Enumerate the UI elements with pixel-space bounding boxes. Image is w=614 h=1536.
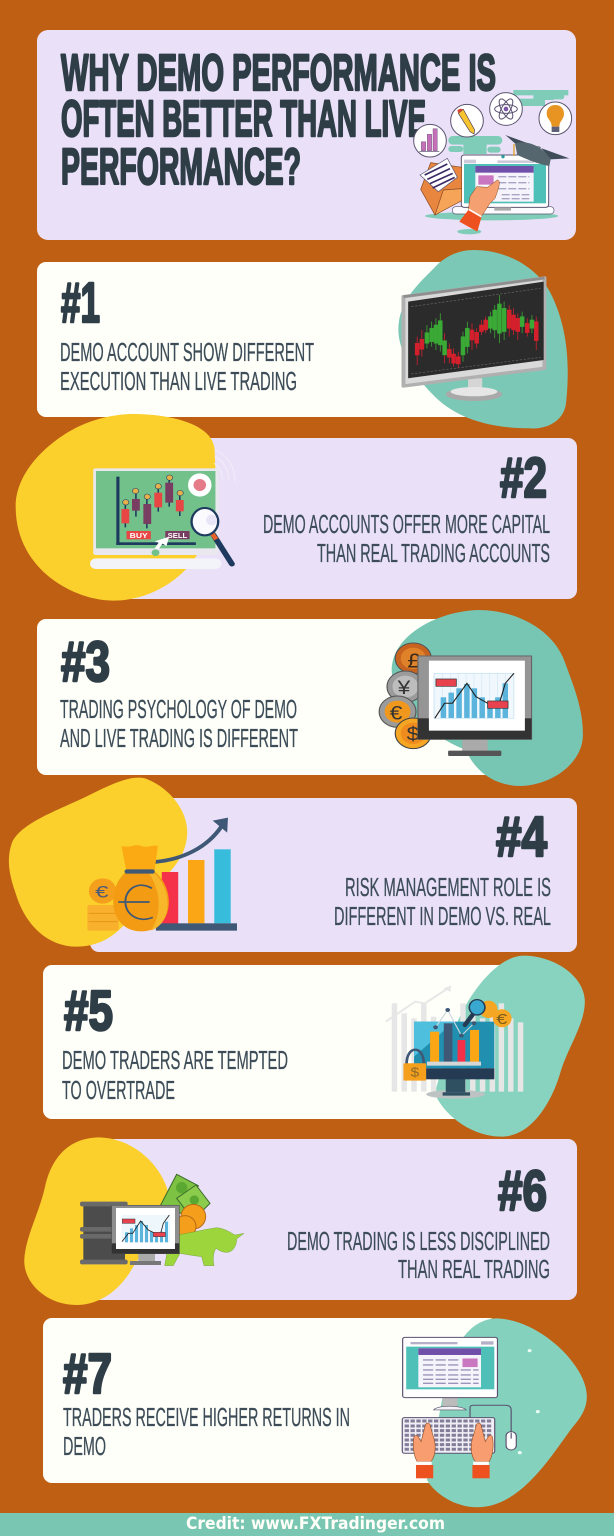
icon: computer with typing hands [402, 1337, 540, 1478]
item 5 text [62, 1045, 288, 1105]
panel: item 6 [24, 1137, 577, 1305]
icon: trading laptop with magnifier [90, 450, 235, 569]
footer credit [0, 1513, 614, 1536]
icon: coins and chart monitor: £ [407, 649, 420, 672]
item 1 text: EXECUTION THAN LIVE TRADING [60, 366, 297, 396]
panel: item 2 [16, 414, 577, 601]
footer credit: Credit: www.FXTradinger.com [186, 1514, 445, 1533]
item 7 text: TRADERS RECEIVE HIGHER RETURNS IN [63, 1402, 350, 1432]
blob: teal [398, 250, 568, 428]
item 1 number: #1 [61, 271, 100, 335]
item 3 text: AND LIVE TRADING IS DIFFERENT [60, 723, 298, 753]
item 2 number: #2 [500, 446, 547, 510]
item 4 text [334, 872, 551, 931]
blob: teal [392, 610, 583, 786]
item 6 text [287, 1226, 550, 1284]
icon: coins and chart monitor [379, 643, 532, 756]
item 5 text: DEMO TRADERS ARE TEMPTED [62, 1045, 288, 1075]
item 7 text: DEMO [63, 1431, 106, 1461]
icon: analytics monitor with lock and coins [386, 985, 523, 1099]
blob: teal [427, 1318, 587, 1507]
panel: item 1 [37, 250, 568, 428]
icon: trading laptop with magnifier: BUY [130, 532, 148, 540]
item 1 text [60, 337, 314, 396]
icon: coins and chart monitor: € [390, 703, 403, 724]
panel: item 4 [9, 778, 577, 952]
item 4 number: #4 [496, 805, 547, 869]
item 5 text: TO OVERTRADE [62, 1075, 175, 1105]
panel: item 7 [43, 1318, 587, 1507]
icon: candlestick monitor [403, 278, 544, 401]
item 6 number: #6 [498, 1159, 547, 1223]
blob: yellow [16, 414, 215, 601]
title heading [61, 44, 496, 195]
item 3 number: #3 [61, 630, 110, 694]
blob: teal [435, 956, 585, 1137]
item 7 number: #7 [63, 1342, 112, 1406]
blob: yellow [9, 778, 187, 947]
item 1 text: DEMO ACCOUNT SHOW DIFFERENT [60, 337, 314, 367]
icon: analytics monitor with lock and coins: $ [411, 1066, 419, 1080]
panel: item 5 [43, 956, 585, 1137]
item 3 text: TRADING PSYCHOLOGY OF DEMO [60, 694, 297, 724]
icon: online learning laptop [414, 90, 572, 234]
title heading: PERFORMANCE? [61, 138, 301, 195]
panel: item 3 [37, 610, 583, 786]
item 2 text [263, 509, 550, 568]
icon: trading laptop with magnifier: SELL [168, 532, 187, 540]
icon: oil barrel, money, monitor and bull [80, 1174, 244, 1266]
icon: coins and chart monitor: $ [407, 724, 420, 745]
item 7 text [63, 1402, 350, 1461]
blob: yellow [24, 1137, 169, 1305]
icon: coins and chart monitor: ¥ [396, 677, 411, 699]
small euro symbol: € [95, 883, 109, 901]
panel: title [37, 30, 576, 240]
item 5 number: #5 [64, 979, 113, 1043]
icon: analytics monitor with lock and coins: € [496, 1012, 507, 1028]
icon: money bag and bar chart [87, 818, 237, 931]
item 3 text [60, 694, 298, 753]
